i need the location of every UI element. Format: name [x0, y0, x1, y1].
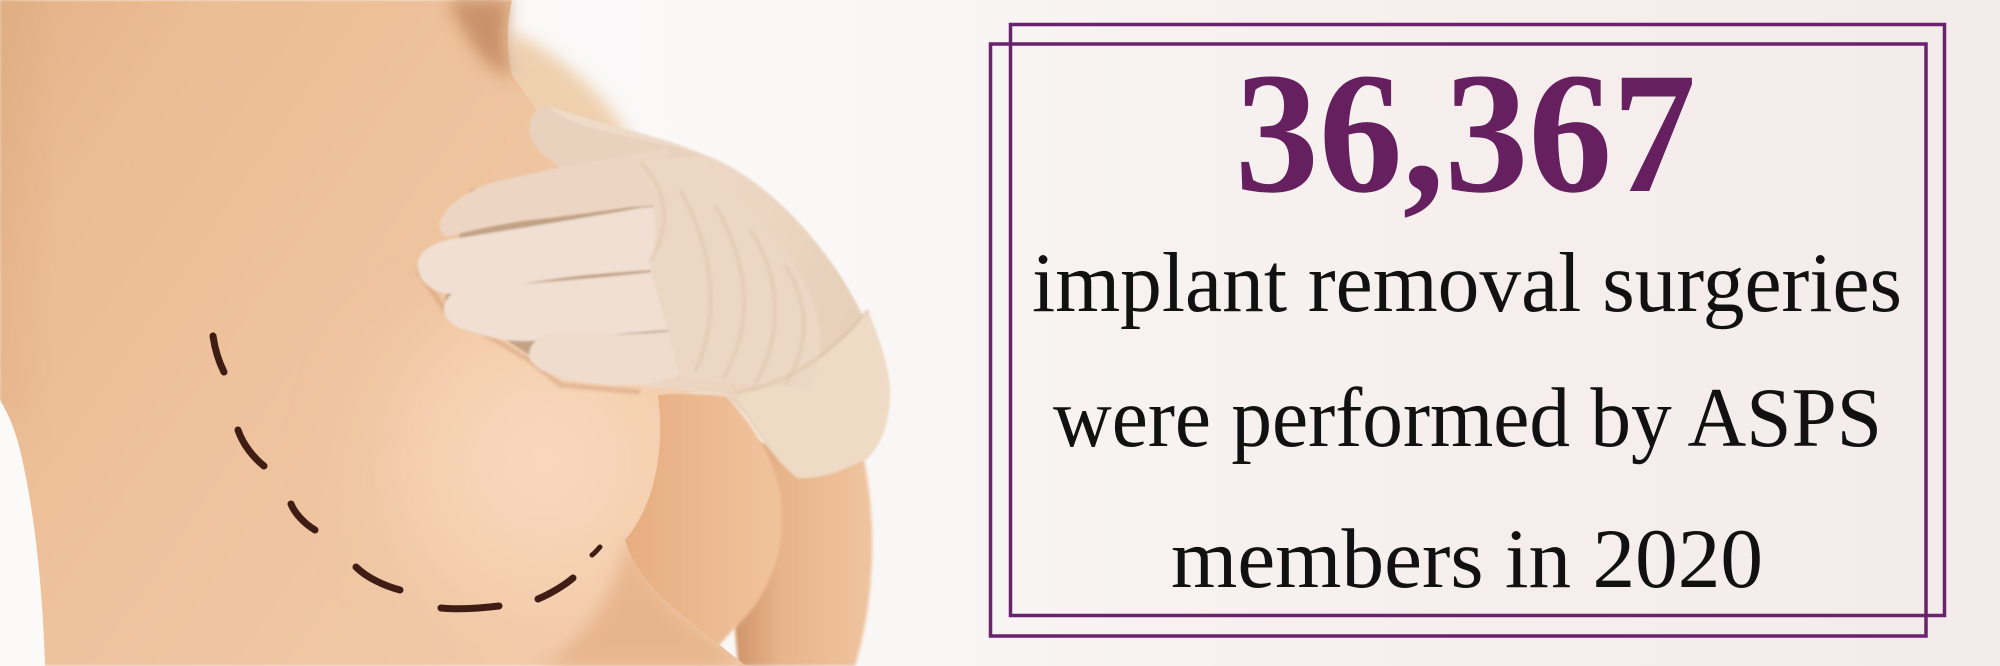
photo: torso with gloved hand	[0, 0, 890, 666]
ring finger	[444, 268, 700, 341]
cuff fold	[735, 310, 868, 393]
description text	[1032, 236, 1902, 606]
surgical marking dashes	[213, 336, 600, 609]
torso	[0, 0, 775, 666]
left back shadow	[0, 0, 30, 420]
big number: 36,367	[1235, 38, 1696, 229]
far shoulder	[500, 30, 640, 220]
shadow under fingers	[418, 270, 640, 392]
glove back of hand and cuff	[548, 106, 890, 478]
line 3: members in 2020	[1171, 512, 1763, 606]
far arm	[720, 440, 872, 666]
cuff shade	[735, 310, 890, 478]
back frame	[1010, 24, 1944, 616]
shadow base between fingers	[445, 150, 700, 375]
index finger	[440, 148, 672, 237]
far breast	[610, 390, 782, 666]
pinky finger	[529, 328, 720, 385]
line 1: implant removal surgeries	[1032, 236, 1902, 330]
line 2: were performed by ASPS	[1053, 371, 1882, 465]
front frame	[990, 44, 1926, 636]
breast highlight	[392, 330, 660, 590]
lower torso shadow	[544, 542, 739, 666]
thumb	[529, 107, 705, 168]
glove palm over finger bases	[640, 155, 820, 390]
glove wrinkles	[640, 162, 804, 385]
middle finger	[418, 205, 680, 294]
stat card	[990, 24, 1944, 636]
gloved hand	[418, 106, 890, 478]
neck shadow	[448, 0, 512, 78]
skin crease near hand	[495, 210, 540, 258]
